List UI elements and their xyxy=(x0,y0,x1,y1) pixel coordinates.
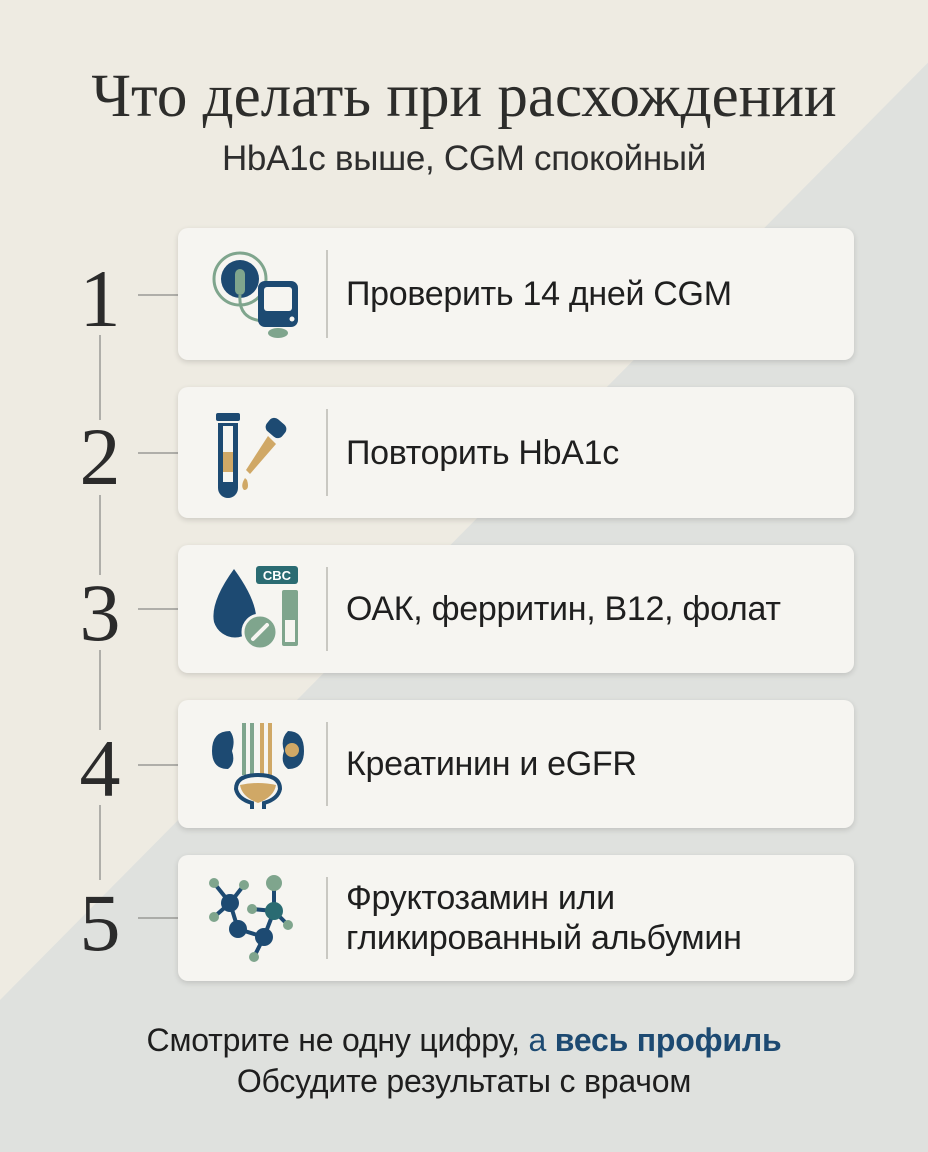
card 3 xyxy=(178,545,854,673)
step 5 text: гликированный альбумин xyxy=(346,919,742,957)
icon: CGM sensor and reader xyxy=(212,252,298,338)
icon: blood drop, pill, CBC tube: CBC xyxy=(263,568,292,583)
footer line 2: Обсудите результаты с врачом xyxy=(237,1063,691,1099)
step 1 text: Проверить 14 дней CGM xyxy=(346,275,732,313)
card 4 xyxy=(178,700,854,828)
card 5 xyxy=(178,855,854,981)
icon: kidneys and bladder xyxy=(212,723,304,809)
card 2 xyxy=(178,387,854,518)
subtitle: HbA1c выше, CGM спокойный xyxy=(222,139,706,178)
number 1: 1 xyxy=(80,253,120,344)
icon: molecule xyxy=(209,875,293,962)
step 5 text: Фруктозамин или xyxy=(346,879,615,917)
step 3 text: ОАК, ферритин, B12, фолат xyxy=(346,590,781,628)
title: Что делать при расхождении xyxy=(91,63,837,130)
number 3: 3 xyxy=(80,567,120,658)
number 2: 2 xyxy=(80,411,120,502)
step 2 text: Повторить HbA1c xyxy=(346,434,619,472)
step 5 text xyxy=(346,879,742,957)
card 1 xyxy=(178,228,854,360)
footer line 1: Смотрите не одну цифру, а весь профиль xyxy=(147,1022,781,1058)
icon: test tube and pipette xyxy=(216,413,286,498)
number 4: 4 xyxy=(80,723,120,814)
number 5: 5 xyxy=(80,877,120,968)
step 4 text: Креатинин и eGFR xyxy=(346,745,637,783)
icon: blood drop, pill, CBC tube xyxy=(213,566,298,648)
